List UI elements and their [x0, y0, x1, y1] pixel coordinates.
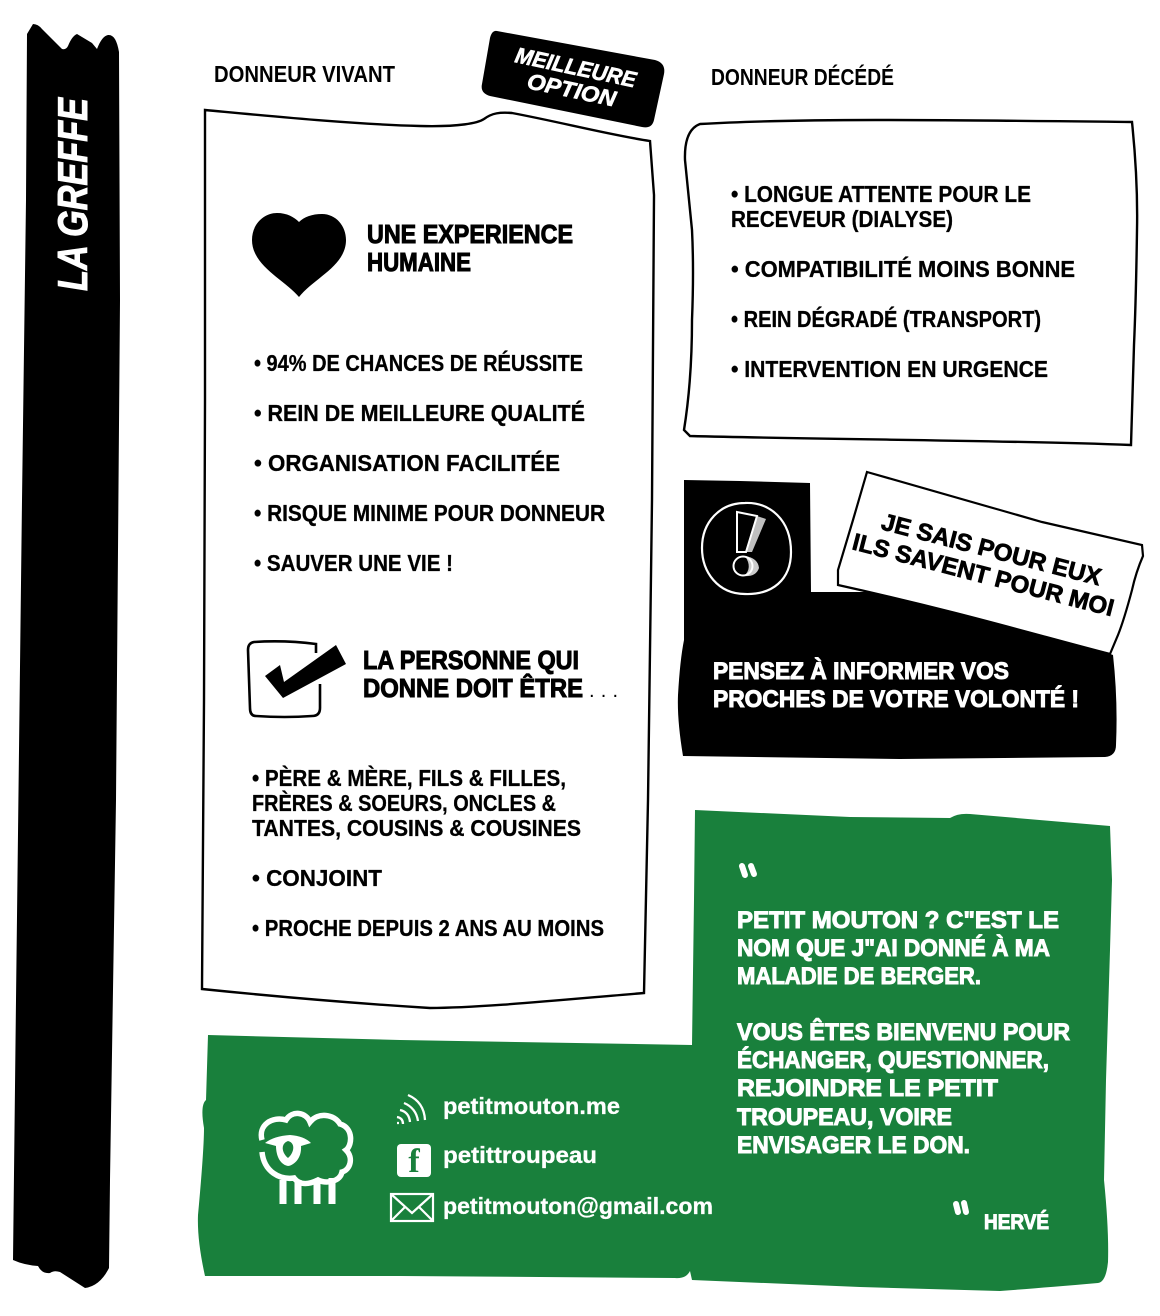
list: eligible donors: • PÈRE & MÈRE, FILS & FILLES,: [252, 764, 566, 791]
panel: donneur décédé: [684, 120, 1137, 445]
list: benefits: • SAUVER UNE VIE !: [254, 550, 453, 576]
quote text: MALADIE DE BERGER.: [737, 963, 981, 990]
callout: je sais pour eux: ILS SAVENT POUR MOI: [849, 529, 1117, 622]
icon: sheep: [261, 1113, 351, 1204]
list: eligible donors: • PROCHE DEPUIS 2 ANS AU MOINS: [252, 915, 604, 941]
heading: la personne qui donne doit être: [363, 645, 618, 703]
quote author: HERVÉ: [984, 1211, 1049, 1234]
panel: pensez à informer: [678, 480, 1117, 759]
badge: meilleure option: MEILLEURE: [513, 42, 640, 93]
icon: checkbox: [248, 641, 346, 717]
quote text: [737, 907, 1070, 1159]
list: drawbacks: • COMPATIBILITÉ MOINS BONNE: [731, 255, 1075, 282]
list: drawbacks: • INTERVENTION EN URGENCE: [731, 356, 1048, 382]
list: eligible donors: • CONJOINT: [252, 865, 382, 891]
quote text: NOM QUE J"AI DONNÉ À MA: [737, 934, 1050, 962]
icon: facebook: f: [408, 1143, 420, 1180]
callout text: PROCHES DE VOTRE VOLONTÉ !: [713, 685, 1079, 713]
list: drawbacks: RECEVEUR (DIALYSE): [731, 206, 953, 232]
heading: donneur décédé: DONNEUR DÉCÉDÉ: [711, 63, 894, 90]
list: benefits: • 94% DE CHANCES DE RÉUSSITE: [254, 349, 583, 376]
heading: une experience humaine: HUMAINE: [367, 247, 471, 277]
icon: facebook: [397, 1143, 431, 1180]
icon: envelope: [391, 1194, 433, 1221]
list: benefits: • RISQUE MINIME POUR DONNEUR: [254, 500, 605, 526]
callout: je sais pour eux: JE SAIS POUR EUX: [878, 509, 1104, 591]
quote text: PETIT MOUTON ? C"EST LE: [737, 907, 1059, 934]
icon: exclamation mark: [702, 503, 791, 594]
quote text: TROUPEAU, VOIRE: [737, 1104, 952, 1131]
quote text: ÉCHANGER, QUESTIONNER,: [737, 1046, 1049, 1074]
list: eligible donors: TANTES, COUSINS & COUSINES: [252, 815, 581, 841]
link: email: petitmouton@gmail.com: [443, 1193, 713, 1219]
icon: opening quote: [742, 866, 754, 875]
quote text: VOUS ÊTES BIENVENU POUR: [737, 1018, 1070, 1046]
list: drawbacks: [731, 181, 1075, 382]
list: benefits: • REIN DE MEILLEURE QUALITÉ: [254, 399, 585, 426]
list: drawbacks: • LONGUE ATTENTE POUR LE: [731, 181, 1031, 207]
panel: green footer and quote: [198, 810, 1112, 1291]
heading: donneur vivant: DONNEUR VIVANT: [214, 61, 395, 87]
list: benefits: [254, 349, 605, 576]
panel: donneur vivant: [202, 110, 654, 1008]
band title: LA GREFFE: [49, 96, 96, 291]
icon: heart: [252, 213, 346, 297]
quote text: ENVISAGER LE DON.: [737, 1132, 970, 1159]
list: eligible donors: FRÈRES & SOEURS, ONCLES &: [252, 789, 556, 816]
quote text: REJOINDRE LE PETIT: [737, 1075, 998, 1102]
heading: la personne qui donne doit être: DONNE DOIT ÊTRE: [363, 673, 583, 703]
heading: la personne qui donne doit être: LA PERSONNE QUI: [363, 645, 579, 675]
left title band: [13, 24, 120, 1288]
icon: closing quote: [956, 1203, 966, 1212]
list: drawbacks: • REIN DÉGRADÉ (TRANSPORT): [731, 305, 1041, 332]
heading: une experience humaine: UNE EXPERIENCE: [367, 219, 573, 249]
heading: la personne qui donne doit être: . . .: [589, 680, 618, 702]
badge: meilleure option: OPTION: [525, 68, 619, 112]
link: facebook group: petittroupeau: [443, 1142, 597, 1168]
callout: je sais pour eux: [838, 472, 1143, 654]
link: website: petitmouton.me: [443, 1093, 620, 1119]
badge: meilleure option: [482, 31, 664, 127]
icon: rss: [397, 1095, 425, 1124]
callout text: PENSEZ À INFORMER VOS: [713, 657, 1009, 685]
callout text: [713, 657, 1079, 713]
list: eligible donors: [252, 764, 604, 941]
heading: une experience humaine: [367, 219, 573, 277]
list: benefits: • ORGANISATION FACILITÉE: [254, 449, 560, 476]
